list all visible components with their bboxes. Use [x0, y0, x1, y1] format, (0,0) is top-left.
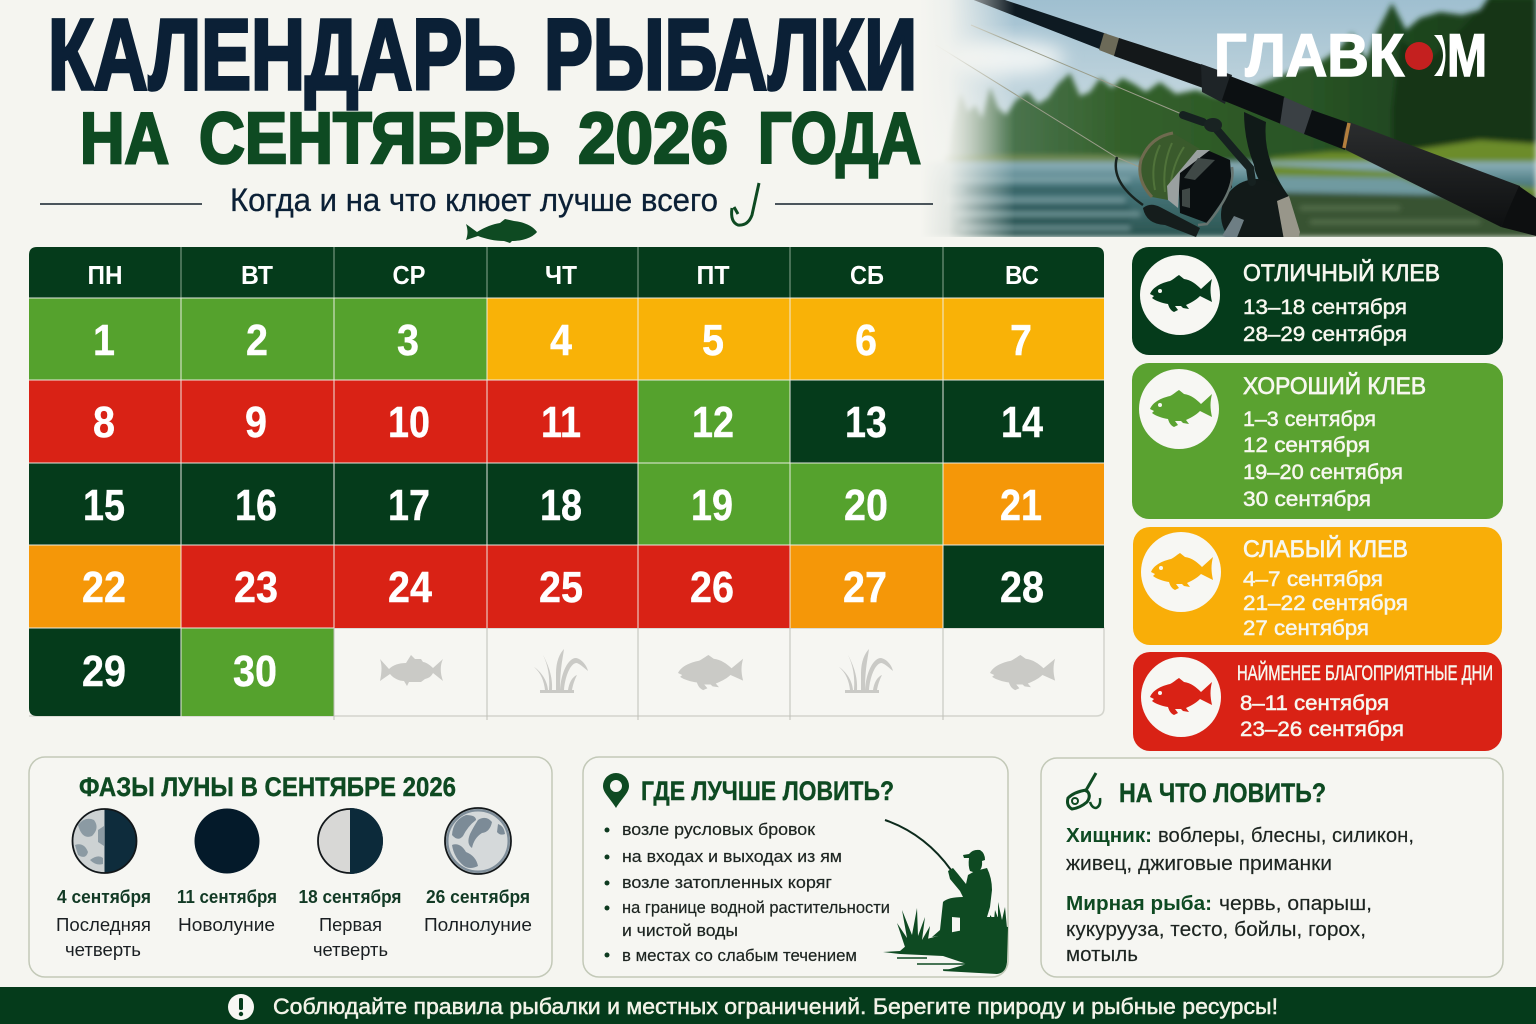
header row: ЧТ — [545, 260, 577, 290]
panel: good bite: 12 сентября — [1243, 433, 1370, 457]
title: РЫБАЛКИ — [544, 0, 917, 111]
subtitle heading: month: 2026 — [578, 99, 728, 179]
photo fade into page — [920, 0, 1015, 237]
moon phases heading: ФАЗЫ ЛУНЫ В СЕНТЯБРЕ 2026 — [79, 772, 456, 802]
header row — [29, 247, 1104, 298]
day numbers: 25 — [539, 563, 583, 612]
cap and head — [963, 850, 985, 873]
spool — [1141, 144, 1200, 200]
reel — [1116, 112, 1300, 251]
panel: good bite: 19–20 сентября — [1243, 460, 1403, 484]
day numbers: 19 — [691, 481, 733, 530]
panel: least favourable days: 23–26 сентября — [1240, 717, 1404, 741]
reel body — [1221, 179, 1284, 237]
day numbers: 27 — [843, 563, 887, 612]
stool — [960, 917, 998, 935]
fishing lines — [936, 25, 1184, 168]
icon: grey fish 1 — [380, 655, 443, 686]
list of fishing spots: на входах и выходах из ям — [622, 847, 842, 866]
rod handle — [1344, 122, 1520, 227]
panel: weak bite — [1133, 527, 1502, 645]
day numbers: 11 — [541, 398, 581, 447]
peaceful fish baits: Мирная рыба: — [1066, 892, 1212, 915]
icon: fish under tagline — [466, 219, 537, 243]
list of fishing spots: на границе водной растительности — [622, 898, 890, 917]
island — [883, 925, 1008, 974]
list of fishing spots: возле затопленных коряг — [622, 873, 832, 892]
moon phase labels: четверть — [65, 940, 141, 960]
panel: weak bite: СЛАБЫЙ КЛЕВ — [1243, 535, 1408, 563]
day numbers: 28 — [1000, 563, 1044, 612]
day numbers: 5 — [702, 316, 724, 365]
moon phase labels: 18 сентября — [298, 887, 402, 907]
rod — [966, 0, 1107, 50]
line wire guard — [1116, 157, 1143, 205]
logo: Главком: ГЛАВК — [1214, 22, 1404, 89]
day numbers: 9 — [245, 398, 267, 447]
bail arm — [1183, 115, 1252, 182]
icon: angler silhouette — [883, 820, 1008, 974]
day numbers: 10 — [388, 398, 430, 447]
peaceful fish baits: мотыль — [1066, 943, 1138, 966]
day numbers: 12 — [692, 398, 734, 447]
icon: grey fish 2 — [678, 655, 743, 690]
handle knob — [1143, 205, 1200, 237]
panel: good bite: ХОРОШИЙ КЛЕВ — [1243, 372, 1426, 400]
subtitle heading: month: СЕНТЯБРЬ — [199, 99, 550, 179]
panel: least favourable days: 8–11 сентября — [1240, 691, 1389, 715]
list of fishing spots: возле русловых бровок — [622, 820, 816, 839]
panel: good bite: 1–3 сентября — [1243, 407, 1376, 431]
header row: ВТ — [241, 260, 273, 290]
day numbers: 16 — [235, 481, 277, 530]
header row: СБ — [850, 260, 884, 290]
moon phase labels — [56, 887, 532, 960]
moon phase labels: Полнолуние — [424, 915, 532, 935]
panel: where to fish — [583, 757, 1008, 977]
subtitle heading: month — [80, 99, 921, 179]
peaceful fish baits: червь, опарыш, — [1219, 892, 1372, 915]
where to fish heading: ГДЕ ЛУЧШЕ ЛОВИТЬ? — [641, 776, 894, 806]
panel: excellent bite: 28–29 сентября — [1243, 322, 1407, 346]
icon: grass 1 — [534, 649, 588, 693]
day numbers: 17 — [388, 481, 430, 530]
day numbers: 26 — [690, 563, 734, 612]
day numbers: 1 — [93, 316, 115, 365]
left reeds — [897, 908, 930, 947]
moon phase labels: Первая — [319, 915, 382, 935]
panel: excellent bite: 13–18 сентября — [1243, 295, 1407, 319]
moon: full moon — [445, 808, 511, 874]
panel: good bite — [1132, 363, 1503, 519]
moon: new moon — [194, 808, 260, 874]
panel: weak bite: 4–7 сентября — [1243, 567, 1383, 591]
day numbers: 21 — [1000, 481, 1042, 530]
photo: fishing rod and reel on a forest lake — [920, 0, 1536, 251]
header row: ВС — [1005, 260, 1039, 290]
reel stem — [1244, 112, 1290, 204]
day numbers: 23 — [234, 563, 278, 612]
icon: warning — [228, 994, 254, 1020]
header row: ПТ — [696, 260, 730, 290]
day numbers — [82, 316, 1044, 696]
panel: weak bite: 27 сентября — [1243, 616, 1369, 640]
panel: what to fish with — [1041, 758, 1503, 977]
rotor — [1178, 150, 1232, 223]
icon: hook — [732, 183, 759, 225]
calendar — [29, 247, 1104, 720]
day numbers: 13 — [845, 398, 887, 447]
subtitle heading: month: ГОДА — [758, 99, 921, 179]
icon: lure and hook — [1068, 773, 1100, 809]
footer banner — [0, 987, 1536, 1024]
what to fish with heading: НА ЧТО ЛОВИТЬ? — [1119, 778, 1326, 808]
header row: СР — [392, 260, 426, 290]
list of fishing spots — [604, 820, 890, 965]
day numbers: 15 — [83, 481, 125, 530]
moon: last quarter — [72, 809, 138, 873]
predator baits — [1066, 824, 1414, 875]
moon phase labels: 11 сентября — [177, 887, 277, 907]
day numbers: 30 — [233, 647, 277, 696]
right reeds — [990, 902, 1007, 928]
panel: moon phases — [29, 757, 552, 977]
tagline: Когда и на что клюет лучше всего — [230, 182, 718, 218]
day numbers: 20 — [844, 481, 888, 530]
header row: ПН — [88, 260, 122, 290]
peaceful fish baits: кукурууза, тесто, бойлы, горох, — [1066, 918, 1366, 941]
day numbers: 22 — [82, 563, 126, 612]
title: КАЛЕНДАРЬ — [48, 0, 516, 111]
predator baits: воблеры, блесны, силикон, — [1158, 824, 1414, 847]
moon phase labels: 4 сентября — [57, 887, 151, 907]
day cells colours — [29, 298, 1104, 720]
panel: least favourable days — [1133, 652, 1502, 751]
moon phase labels: Последняя — [56, 915, 151, 935]
day numbers: 7 — [1010, 316, 1032, 365]
day numbers: 3 — [397, 316, 419, 365]
day numbers: 6 — [855, 316, 877, 365]
icon: grass 2 — [839, 649, 893, 693]
predator baits: Хищник: — [1066, 824, 1152, 847]
panel: excellent bite — [1132, 247, 1503, 355]
logo: Главком: М — [1447, 22, 1487, 89]
moon phase labels: четверть — [313, 940, 388, 960]
moon: first quarter — [318, 808, 383, 874]
moon phase labels: 26 сентября — [426, 887, 530, 907]
body and legs — [932, 868, 992, 937]
list of fishing spots: в местах со слабым течением — [622, 946, 857, 965]
day numbers: 2 — [246, 316, 268, 365]
day numbers: 24 — [388, 563, 432, 612]
moon phase labels: Новолуние — [178, 915, 275, 935]
day numbers: 14 — [1001, 398, 1043, 447]
subtitle heading: month: НА — [80, 99, 169, 179]
day numbers: 18 — [540, 481, 582, 530]
icon: grey fish 3 — [990, 655, 1055, 690]
footer banner: Соблюдайте правила рыбалки и местных ограничений. Берегите природу и рыбные ресурсы! — [273, 994, 1278, 1019]
panel: good bite: 30 сентября — [1243, 487, 1371, 511]
icon: map pin — [603, 773, 629, 808]
day numbers: 8 — [93, 398, 115, 447]
calendar frame — [29, 628, 1104, 716]
water lines — [897, 958, 995, 970]
panel: excellent bite: ОТЛИЧНЫЙ КЛЕВ — [1243, 259, 1440, 287]
predator baits: живец, джиговые приманки — [1066, 852, 1332, 875]
day numbers: 4 — [550, 316, 572, 365]
peaceful fish baits — [1066, 892, 1372, 966]
day numbers: 29 — [82, 647, 126, 696]
list of fishing spots: и чистой воды — [622, 921, 738, 940]
panel: weak bite: 21–22 сентября — [1243, 591, 1408, 615]
